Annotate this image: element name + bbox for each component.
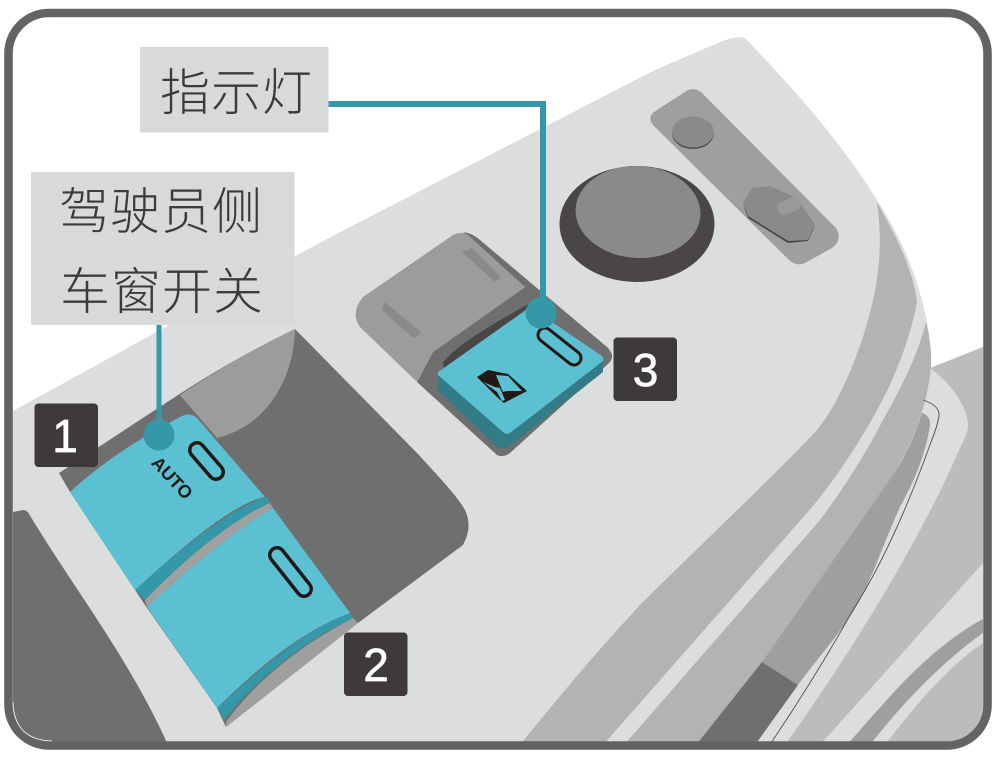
recess highlight wedge [180, 329, 295, 438]
number badge 2 [344, 632, 408, 696]
number badge 2: 2 [363, 639, 389, 691]
AUTO text: AUTO [147, 453, 197, 503]
switch 2: passenger window [147, 508, 358, 727]
label: indicator light [140, 47, 328, 132]
mirror control panel [650, 89, 839, 264]
number badge 3: 3 [633, 344, 658, 396]
switch 3: lock switch [438, 307, 603, 448]
icon: window lock [477, 370, 527, 403]
indicator light dot [526, 298, 556, 328]
switch 1 pill [197, 450, 216, 472]
mirror selector [743, 186, 815, 243]
switch 3 pill [545, 335, 574, 358]
label: indicator light: 指示灯 [160, 65, 313, 121]
number badge 3 [614, 338, 677, 401]
lower left panel [13, 510, 168, 745]
switch 1: driver window [70, 414, 273, 607]
mirror button [672, 116, 714, 149]
lock switch housing [356, 232, 612, 456]
console side bands [520, 202, 939, 745]
driver switch dot [144, 420, 174, 450]
number badge 1: 1 [52, 410, 78, 462]
label: driver side window switch: 车窗开关 [60, 264, 264, 320]
switch 2 pill [277, 555, 304, 589]
switch recess [59, 329, 469, 727]
leader line: driver window switch [144, 325, 174, 450]
leader line: indicator light [326, 104, 556, 328]
number badge 1 [34, 404, 98, 467]
label: driver side window switch: 驾驶员侧 [59, 184, 263, 240]
control knob [560, 163, 714, 282]
lower right trim [758, 347, 983, 742]
label: driver side window switch [31, 172, 294, 325]
